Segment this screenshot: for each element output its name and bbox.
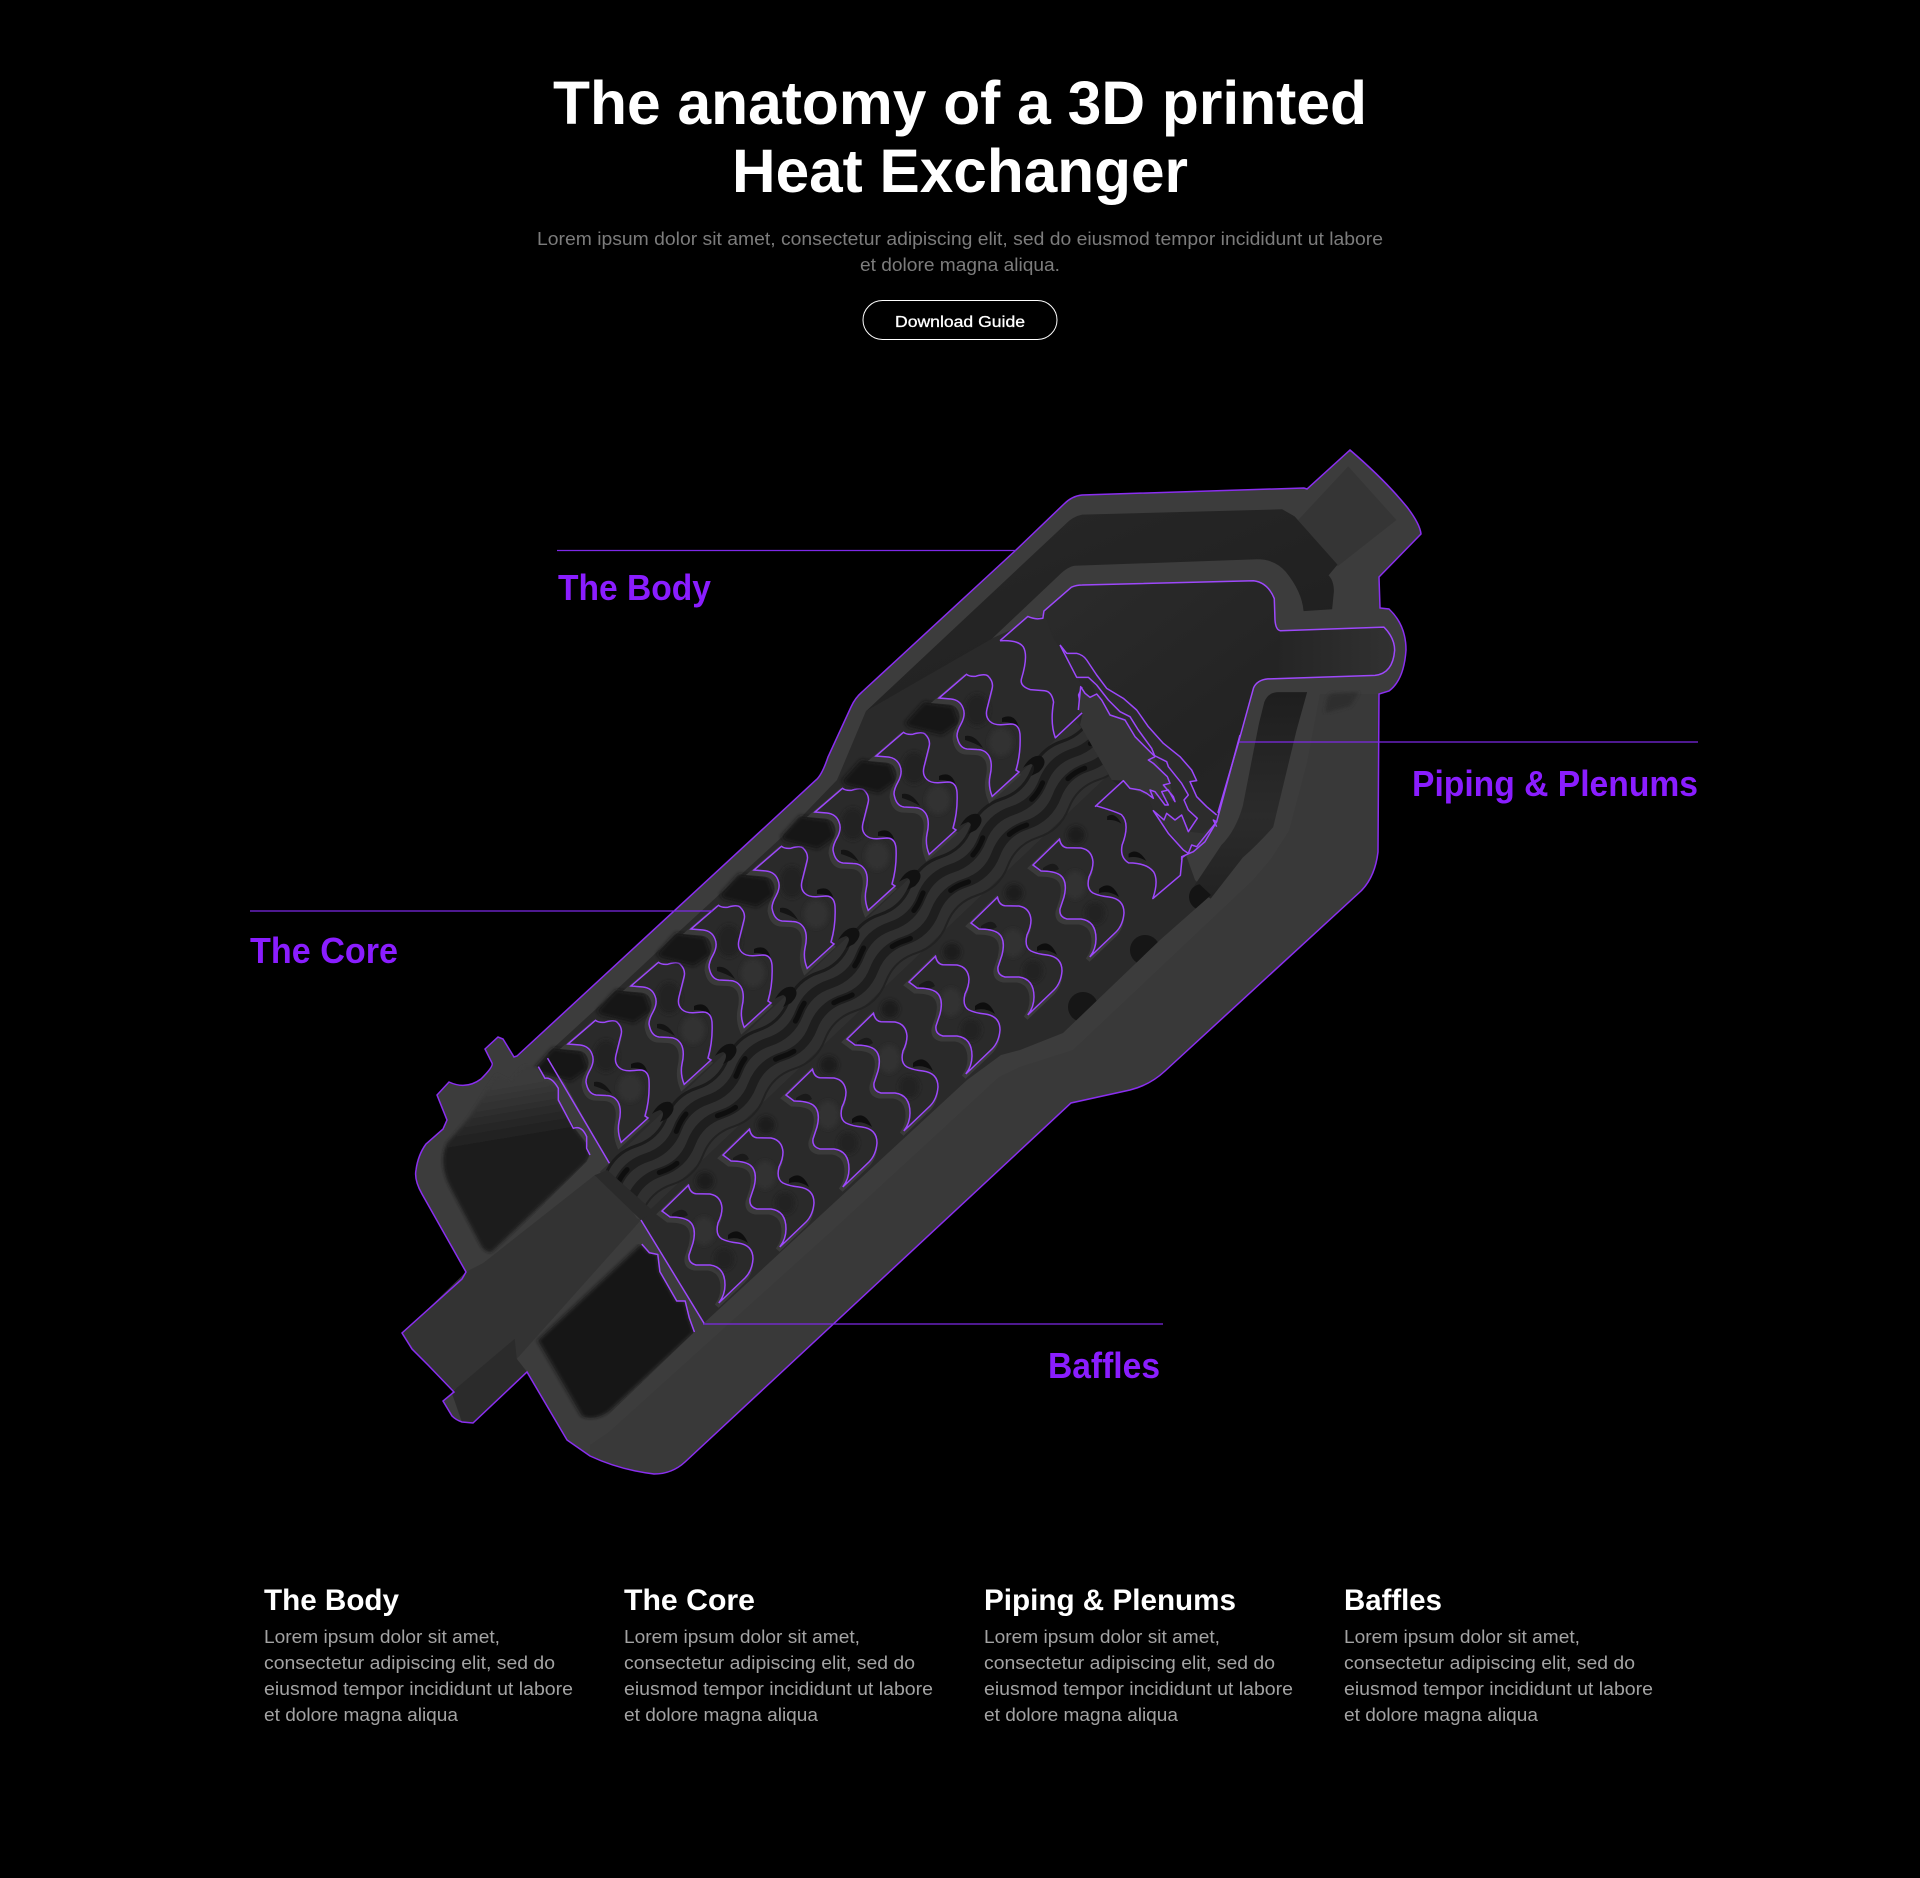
torn line: inner [1060, 645, 1175, 807]
description: The Core: The Core [624, 1584, 755, 1617]
leader and label: Baffles: Baffles [1048, 1345, 1160, 1386]
title: Heat Exchanger [732, 137, 1188, 205]
description: The Body: Lorem ipsum dolor sit amet, [264, 1627, 500, 1647]
intro paragraph: et dolore magna aliqua. [860, 255, 1060, 275]
description: Baffles: et dolore magna aliqua [1344, 1705, 1539, 1725]
description: The Core: et dolore magna aliqua [624, 1705, 819, 1725]
body outline [402, 450, 1421, 1474]
central wavy flow channels [600, 708, 1133, 1218]
outer wall shading band [590, 694, 1379, 1474]
description: Baffles: Baffles [1344, 1584, 1442, 1617]
leader and label: The Core: The Core [250, 930, 398, 971]
download button: Download Guide [895, 314, 1025, 331]
central tube [403, 1170, 641, 1390]
body silhouette [402, 450, 1421, 1474]
upper plenum cavity [866, 466, 1396, 713]
dark drain holes along lower wall [1068, 884, 1215, 1022]
torn line: outer [1060, 645, 1217, 815]
description: The Body: The Body [264, 1584, 399, 1617]
torn baffle detail [1060, 645, 1240, 860]
description: Piping & Plenums: et dolore magna aliqua [984, 1705, 1179, 1725]
lower plenum channel [1193, 692, 1307, 899]
lower row of core fins [660, 826, 1124, 1306]
manifold end: tube, lower cavity and baffle plates [403, 1058, 704, 1423]
leader and label: Piping & Plenums: Piping & Plenums [1412, 763, 1698, 804]
download button [863, 300, 1057, 340]
upper end cavity [443, 1067, 590, 1252]
title: The anatomy of a 3D printed [553, 69, 1367, 137]
description: Piping & Plenums: consectetur adipiscing elit, sed do [984, 1653, 1275, 1673]
description: The Core: eiusmod tempor incididunt ut labore [624, 1679, 933, 1699]
description: Piping & Plenums [984, 1584, 1293, 1725]
plenum wall lower segment [1217, 735, 1240, 822]
last lower fin [1096, 781, 1186, 899]
description: The Core: consectetur adipiscing elit, sed do [624, 1653, 915, 1673]
description: Piping & Plenums: Piping & Plenums [984, 1584, 1236, 1617]
lower baffle plate [641, 1220, 704, 1323]
inlet plenum and connecting pipe [1000, 581, 1395, 899]
lower end cavity [538, 1244, 694, 1418]
last upper fin [1000, 611, 1082, 738]
connecting pipe [1279, 628, 1394, 678]
last upper fin outline [1000, 641, 1082, 738]
torn line: third [1078, 687, 1217, 853]
description: The Body [264, 1584, 573, 1725]
intro paragraph [537, 229, 1383, 275]
intro paragraph: Lorem ipsum dolor sit amet, consectetur adipiscing elit, sed do eiusmod tempor incididunt ut labore [537, 229, 1383, 249]
description: The Core [624, 1584, 933, 1725]
description: The Body: eiusmod tempor incididunt ut labore [264, 1679, 573, 1699]
description: The Core: Lorem ipsum dolor sit amet, [624, 1627, 860, 1647]
core chamber [548, 615, 1239, 1323]
heat exchanger cutaway [402, 450, 1421, 1474]
plenum interior [1044, 581, 1395, 855]
upper baffle plate [548, 1058, 609, 1163]
description: Baffles: Lorem ipsum dolor sit amet, [1344, 1627, 1580, 1647]
infographic canvas [250, 80, 1698, 1725]
band between torn lines [1060, 645, 1217, 852]
upper row of core fins [534, 674, 1045, 1145]
leader and label: The Body: The Body [558, 567, 711, 608]
description: Piping & Plenums: eiusmod tempor incididunt ut labore [984, 1679, 1293, 1699]
plenum outline [1000, 581, 1395, 813]
last lower fin outline [1096, 806, 1186, 899]
description: Baffles: consectetur adipiscing elit, sed do [1344, 1653, 1635, 1673]
title [553, 69, 1367, 205]
description: Baffles: eiusmod tempor incididunt ut labore [1344, 1679, 1653, 1699]
description: The Body: consectetur adipiscing elit, sed do [264, 1653, 555, 1673]
description: The Body: et dolore magna aliqua [264, 1705, 459, 1725]
description: Baffles [1344, 1584, 1653, 1725]
description: Piping & Plenums: Lorem ipsum dolor sit amet, [984, 1627, 1220, 1647]
slab [1078, 687, 1175, 802]
